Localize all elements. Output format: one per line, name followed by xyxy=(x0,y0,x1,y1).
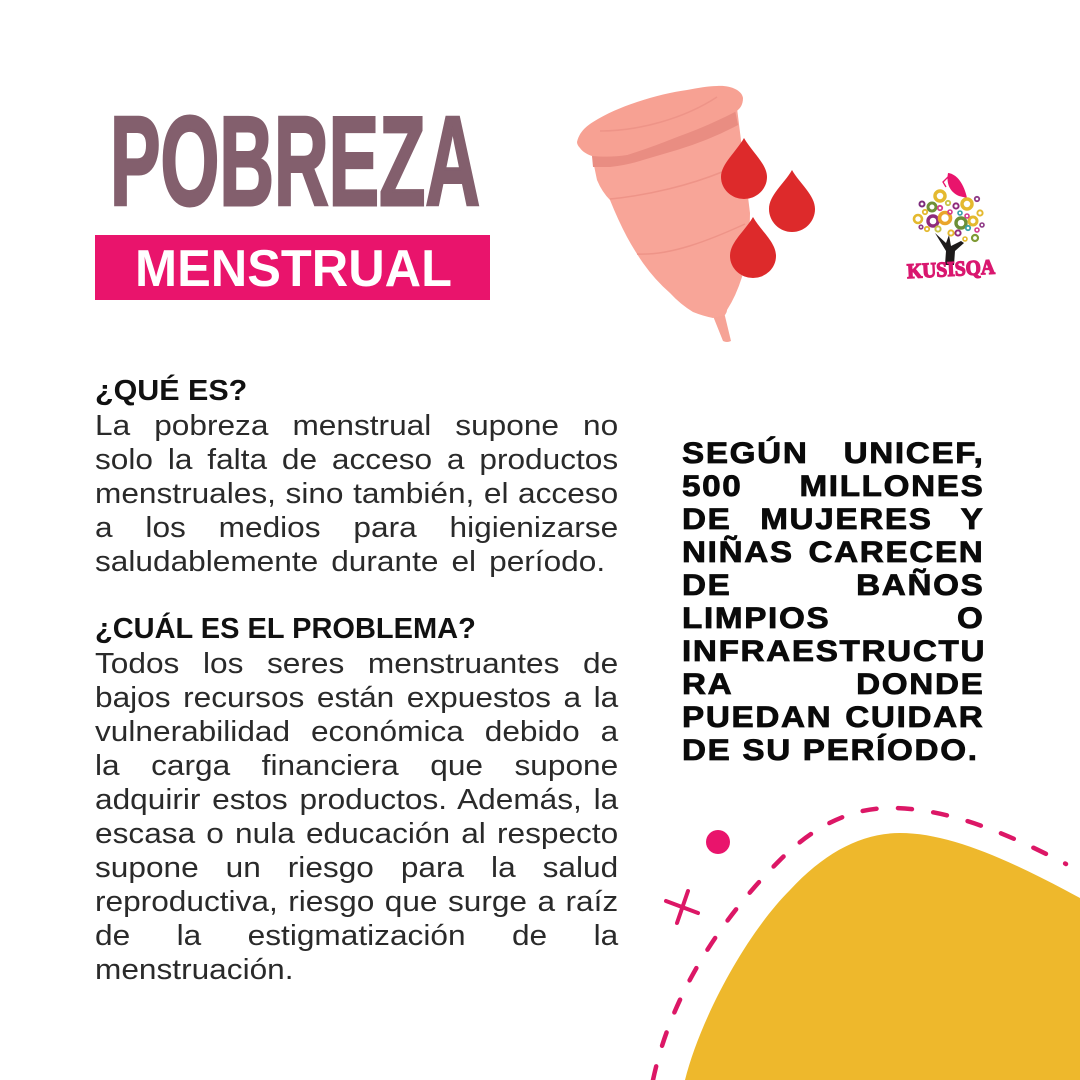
callout: unicef statistic xyxy=(682,436,986,767)
text block: que es xyxy=(95,410,618,578)
text block: que es: a los medios para higienizarse xyxy=(95,512,618,544)
pink cross xyxy=(666,891,698,923)
callout: unicef statistic: INFRAESTRUCTU xyxy=(682,635,986,668)
icon: menstrual cup with blood drops xyxy=(577,86,815,342)
text block: problema: supone un riesgo para la salud xyxy=(95,852,618,884)
text block: problema: escasa o nula educación al respecto xyxy=(95,818,618,850)
text block: problema: reproductiva, riesgo que surge a raíz xyxy=(95,886,618,918)
callout: unicef statistic: DE SU PERÍODO. xyxy=(682,734,979,767)
subtitle banner: MENSTRUAL xyxy=(135,240,452,298)
heading: que es: ¿QUÉ ES? xyxy=(95,375,247,407)
text block: que es: saludablemente durante el período. xyxy=(95,546,605,578)
text block: problema: Todos los seres menstruantes de xyxy=(95,648,618,680)
callout: unicef statistic: 500 MILLONES xyxy=(682,470,984,503)
callout: unicef statistic: RA DONDE xyxy=(682,668,984,701)
pink dot xyxy=(706,830,730,854)
callout: unicef statistic: PUEDAN CUIDAR xyxy=(682,701,984,734)
text block: problema: menstruación. xyxy=(95,954,294,986)
callout: unicef statistic: SEGÚN UNICEF, xyxy=(682,437,984,470)
text block: problema: bajos recursos están expuestos a la xyxy=(95,682,618,714)
text block: que es: menstruales, sino también, el acceso xyxy=(95,478,618,510)
title: POBREZA xyxy=(110,90,480,232)
text block: problema: de la estigmatización de la xyxy=(95,920,618,952)
yellow blob xyxy=(685,833,1080,1080)
dashed arc xyxy=(653,808,1066,1080)
text block: problema: adquirir estos productos. Además, la xyxy=(95,784,618,816)
text block: problema xyxy=(95,648,618,986)
callout: unicef statistic: NIÑAS CARECEN xyxy=(682,536,984,569)
callout: unicef statistic: DE BAÑOS xyxy=(682,569,984,602)
callout: unicef statistic: LIMPIOS O xyxy=(682,602,984,635)
text block: que es: La pobreza menstrual supone no xyxy=(95,410,618,442)
heading: cual es el problema: ¿CUÁL ES EL PROBLEMA? xyxy=(95,613,476,645)
logo: Kusisqa tree: KUSISQA xyxy=(906,255,996,283)
text block: problema: vulnerabilidad económica debido a xyxy=(95,716,618,748)
text block: que es: solo la falta de acceso a productos xyxy=(95,444,618,476)
logo: Kusisqa tree xyxy=(906,173,996,283)
callout: unicef statistic: DE MUJERES Y xyxy=(682,503,984,536)
text block: problema: la carga financiera que supone xyxy=(95,750,618,782)
